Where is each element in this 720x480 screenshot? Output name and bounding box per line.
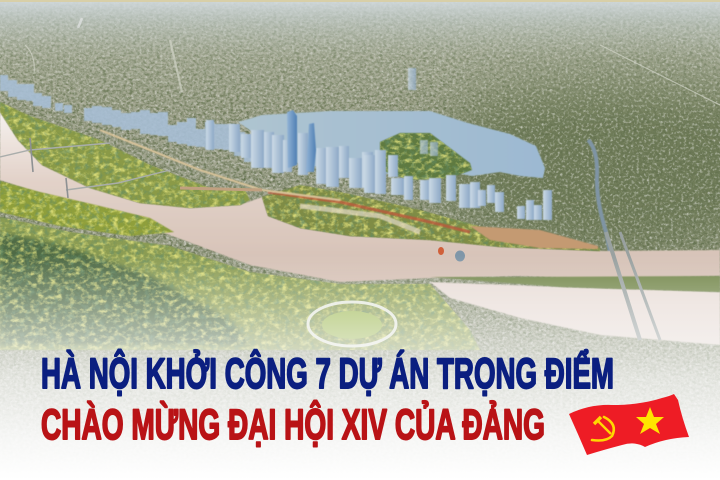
south bank green area xyxy=(0,217,720,350)
high-rise district west xyxy=(0,75,267,166)
lower sandy river bank xyxy=(430,282,720,345)
lake xyxy=(238,111,545,180)
stadium xyxy=(308,302,396,346)
canal, right side xyxy=(588,140,612,262)
green park strip north bank xyxy=(0,102,600,251)
left river island xyxy=(0,181,174,236)
hot air balloons xyxy=(438,247,465,262)
hammer and sickle xyxy=(592,417,614,440)
white fade behind title xyxy=(0,255,720,480)
title xyxy=(41,349,614,449)
river bridges xyxy=(0,138,262,198)
city roads xyxy=(25,18,720,105)
right side roads and bridge xyxy=(606,232,660,340)
vegetation texture xyxy=(0,100,620,360)
star xyxy=(636,407,664,434)
lake island xyxy=(380,133,472,180)
landmark towers xyxy=(287,110,316,172)
park paths and sand xyxy=(100,130,598,249)
river xyxy=(0,112,720,282)
high-rise district central xyxy=(206,68,552,220)
icon: party flag xyxy=(569,394,689,455)
